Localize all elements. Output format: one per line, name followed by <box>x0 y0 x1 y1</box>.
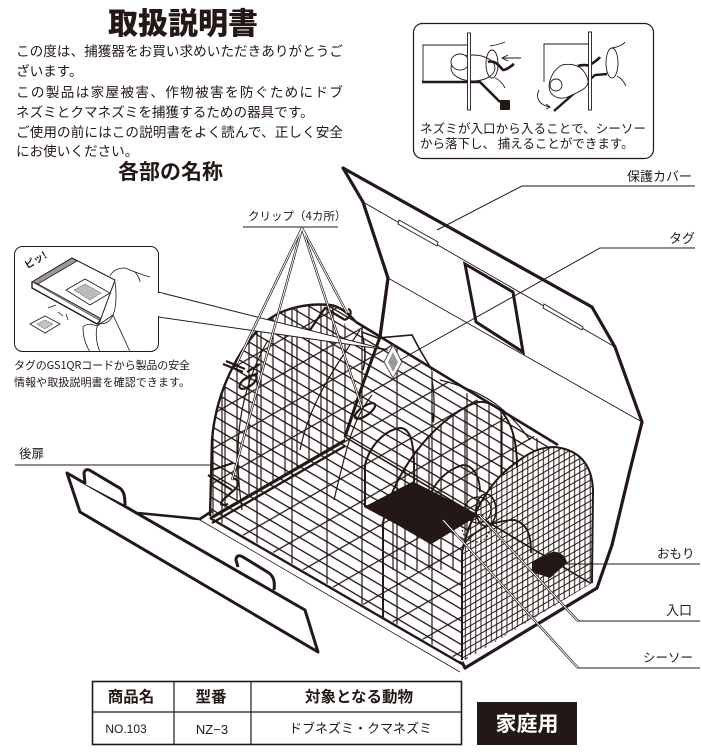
clips <box>208 308 432 505</box>
label: clips: クリップ（4カ所） <box>248 208 346 224</box>
badge: household use <box>477 702 577 745</box>
table values: NZ−3 <box>196 722 228 737</box>
leader: weight <box>553 563 700 565</box>
weight <box>532 552 567 578</box>
label: seesaw: シーソー <box>643 647 693 666</box>
table headers: 商品名 <box>108 685 154 707</box>
seesaw plate <box>365 482 478 543</box>
intro text block: ざいます。 <box>16 60 83 80</box>
icon: mouse entering <box>422 33 521 110</box>
cage frame <box>210 305 593 664</box>
front flap <box>67 470 460 672</box>
table values: ドブネズミ・クマネズミ <box>289 718 432 737</box>
label: tag: タグ <box>669 228 695 247</box>
cover fold lines <box>363 202 642 422</box>
leader: seesaw <box>443 520 700 668</box>
table values <box>105 718 432 737</box>
QR caption: タグのGS1QRコードから製品の安全 <box>14 357 190 373</box>
cover inner edge over cage <box>345 278 388 437</box>
label: entrance: 入口 <box>666 600 692 619</box>
protective cover <box>343 168 642 668</box>
flap handles <box>84 470 274 590</box>
cage front face mesh <box>463 448 592 659</box>
cage <box>200 278 610 670</box>
panel caption: から落下し、 捕えることができます。 <box>420 133 634 152</box>
icon: mouse falling <box>537 32 626 111</box>
heading: parts names: 各部の名称 <box>118 156 223 186</box>
cover window <box>465 264 523 352</box>
leader: rear door <box>15 464 210 466</box>
table headers: 対象となる動物 <box>305 685 413 707</box>
label: weight: おもり <box>657 543 695 562</box>
panel: how the trap works <box>414 24 654 158</box>
beep label: ピッ! <box>21 247 49 272</box>
icon: phone scanning QR <box>30 258 150 352</box>
label: rear door: 後扉 <box>19 443 44 462</box>
leader: tag <box>400 248 695 360</box>
table headers <box>108 685 413 707</box>
title: 取扱説明書 <box>108 0 258 43</box>
intro text block: にお使いください。 <box>16 140 138 160</box>
QR caption: 情報や取扱説明書を確認できます。 <box>14 374 190 390</box>
tag <box>384 345 402 378</box>
badge: household use: 家庭用 <box>496 708 558 738</box>
leader: clips <box>232 227 362 480</box>
intro text block <box>16 40 343 160</box>
table values: NO.103 <box>105 722 147 736</box>
cover tabs <box>398 220 583 330</box>
leader: entrance <box>480 516 700 621</box>
product table <box>92 681 462 745</box>
intro text block: ご使用の前にはこの説明書をよく読んで、正しく安全 <box>16 121 343 141</box>
label: cover: 保護カバー <box>627 166 692 185</box>
QR caption <box>14 357 190 390</box>
table headers: 型番 <box>195 685 227 707</box>
panel caption: ネズミが入口から入ることで、シーソー <box>420 118 646 137</box>
panel: QR scan tag <box>14 246 388 390</box>
flap fold line <box>200 520 460 672</box>
intro text block: この度は、捕獲器をお買い求めいただきありがとうご <box>16 40 343 60</box>
intro text block: この製品は家屋被害、作物被害を防ぐためにドブ <box>16 81 343 101</box>
leader: cover <box>437 186 695 230</box>
intro text block: ネズミとクマネズミを捕獲するための器具です。 <box>16 101 314 121</box>
panel caption <box>420 118 646 152</box>
door connector <box>138 511 212 519</box>
